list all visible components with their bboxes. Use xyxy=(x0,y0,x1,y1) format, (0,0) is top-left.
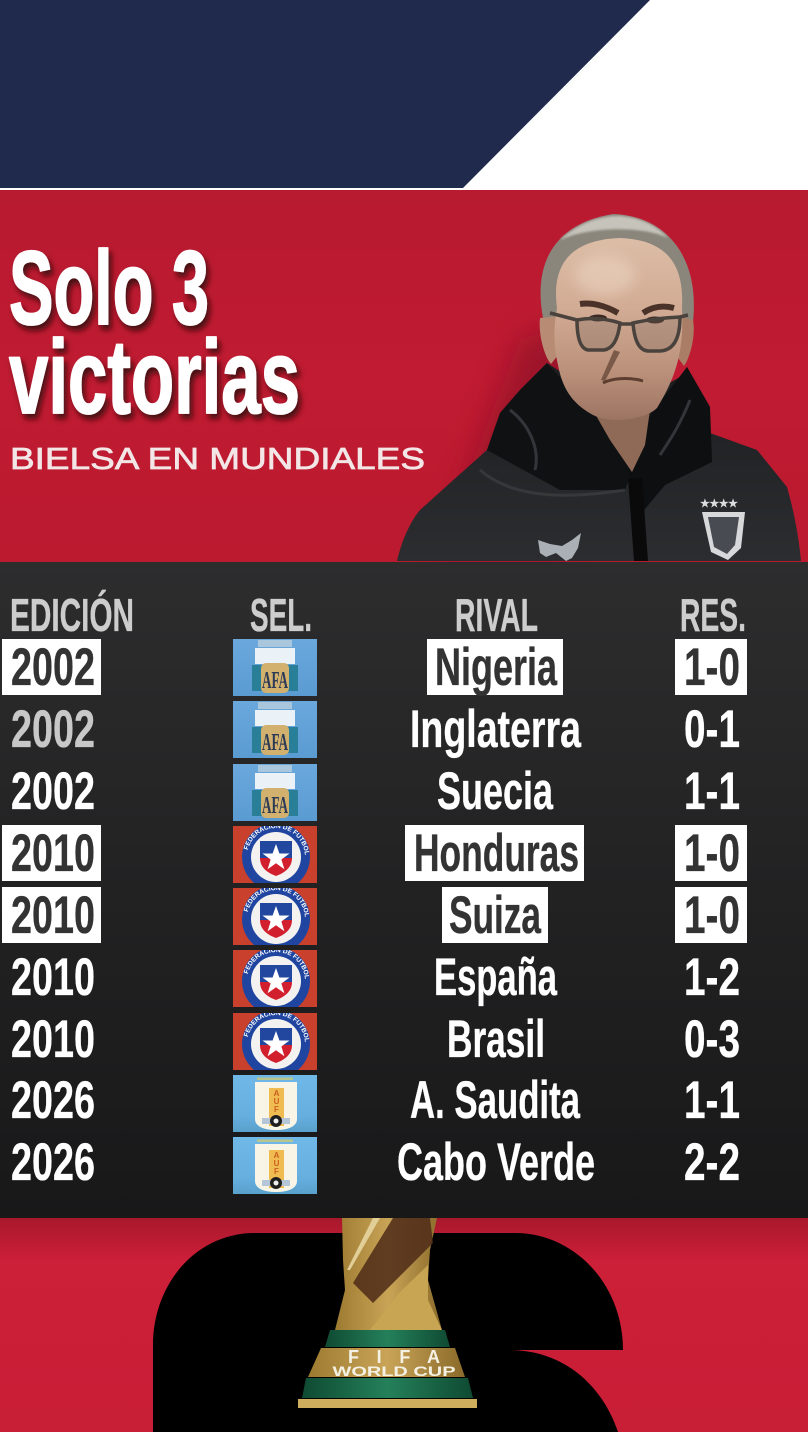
icon: jacket crest: ★★★★ xyxy=(700,498,738,510)
icon: puma logo xyxy=(538,533,581,561)
header band: navy and white diagonal xyxy=(0,0,808,190)
column: resultado: 0-3 xyxy=(684,1010,740,1069)
icon: world cup trophy: FIFA xyxy=(348,1347,440,1367)
column: rival: Honduras xyxy=(414,824,579,883)
column: resultado: 1-1 xyxy=(684,1071,740,1130)
column: rival xyxy=(397,638,595,1192)
column: rival: Suecia xyxy=(437,762,553,821)
table headings: RIVAL xyxy=(455,589,538,641)
column: resultado: 1-0 xyxy=(684,824,740,883)
column: edición: 2010 xyxy=(11,824,95,883)
column: selección crests xyxy=(233,639,317,1194)
column: resultado: 2-2 xyxy=(684,1133,740,1192)
column: edición: 2026 xyxy=(11,1133,95,1192)
column: rival: Inglaterra xyxy=(410,700,581,759)
title: Solo 3 xyxy=(9,230,209,347)
column: rival: A. Saudita xyxy=(410,1071,580,1130)
panel: results table xyxy=(0,562,808,1218)
title: victorias xyxy=(9,319,300,436)
column: rival: Cabo Verde xyxy=(397,1133,595,1192)
big black numeral 26 emblem xyxy=(153,1233,623,1432)
panel: red hero background xyxy=(0,190,808,562)
table headings: SEL. xyxy=(250,589,312,641)
column: resultado: 1-1 xyxy=(684,762,740,821)
table headings: RES. xyxy=(680,589,746,641)
column: edición: 2010 xyxy=(11,948,95,1007)
subtitle: BIELSA EN MUNDIALES xyxy=(10,441,425,476)
column: edición: 2010 xyxy=(11,886,95,945)
column: resultado xyxy=(684,638,740,1192)
column: rival: Suiza xyxy=(449,886,541,945)
icon: world cup trophy: WORLD CUP xyxy=(332,1363,456,1379)
column: edición: 2026 xyxy=(11,1071,95,1130)
column: resultado: 1-2 xyxy=(684,948,740,1007)
highlight boxes: wins xyxy=(2,639,747,943)
table headings: EDICIÓN xyxy=(10,589,134,641)
column: resultado: 1-0 xyxy=(684,638,740,697)
icon: jacket crest xyxy=(700,498,745,560)
column: rival: Brasil xyxy=(447,1010,545,1069)
icon: world cup trophy xyxy=(298,1218,477,1408)
column: edición: 2002 xyxy=(11,700,95,759)
column: edición xyxy=(11,638,95,1192)
title xyxy=(9,230,300,436)
table headings xyxy=(10,589,746,641)
column: edición: 2002 xyxy=(11,638,95,697)
column: resultado: 1-0 xyxy=(684,886,740,945)
column: rival: España xyxy=(434,948,557,1007)
column: edición: 2002 xyxy=(11,762,95,821)
portrait: Marcelo Bielsa xyxy=(397,214,801,561)
column: rival: Nigeria xyxy=(435,638,557,697)
column: edición: 2010 xyxy=(11,1010,95,1069)
panel: red footer background xyxy=(0,1218,808,1432)
column: resultado: 0-1 xyxy=(684,700,740,759)
